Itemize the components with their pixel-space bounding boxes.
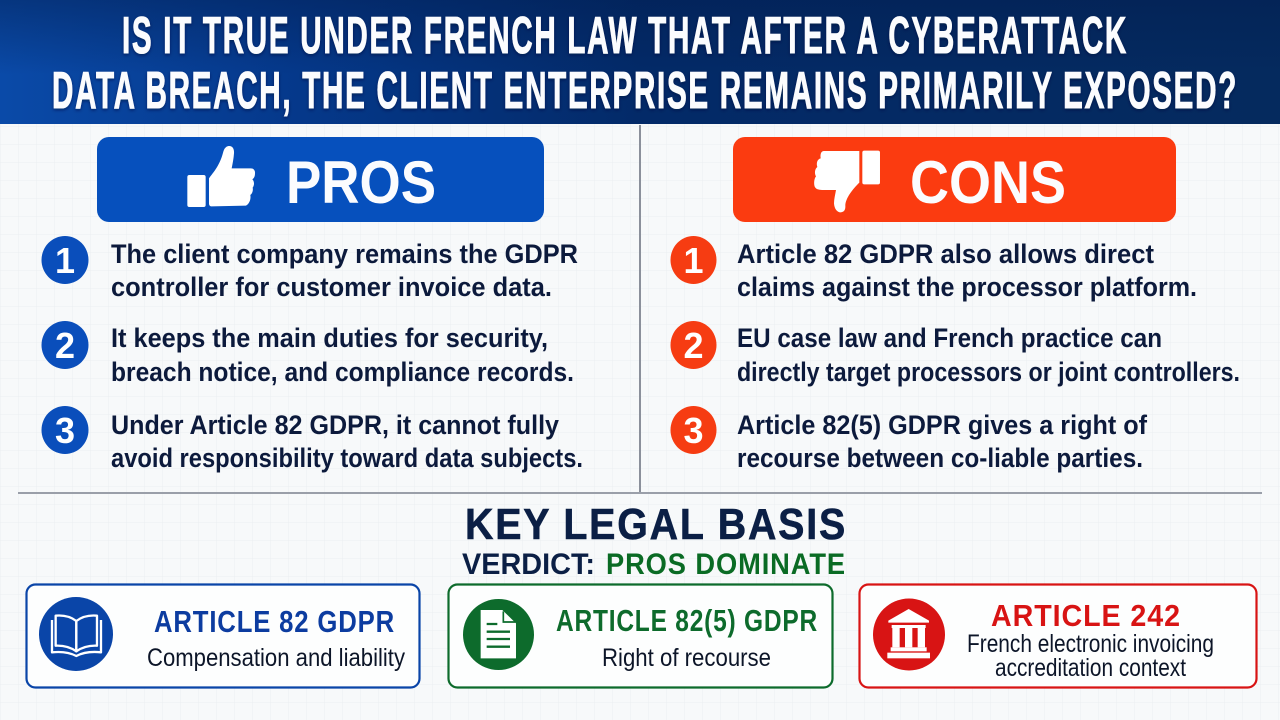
pro item 2: 2 bbox=[55, 325, 75, 366]
card: article 82 gdpr: Compensation and liability bbox=[147, 644, 405, 672]
icon: thumbs up bbox=[187, 146, 255, 207]
pro item 3: 3 bbox=[55, 410, 75, 451]
con item 1 bbox=[670, 236, 1197, 302]
con item 3: recourse between co-liable parties. bbox=[737, 443, 1143, 473]
card: article 82 gdpr: ARTICLE 82 GDPR bbox=[154, 604, 395, 639]
cons heading banner bbox=[733, 137, 1176, 222]
pro item 3 bbox=[42, 406, 583, 473]
card: article 242: French electronic invoicing bbox=[967, 630, 1214, 658]
pro item 1 bbox=[42, 236, 578, 302]
card: article 82(5) gdpr bbox=[448, 584, 832, 688]
verdict line bbox=[462, 548, 846, 581]
pros heading banner: PROS bbox=[286, 149, 436, 216]
icon: document bbox=[463, 599, 534, 670]
card: article 242 bbox=[860, 584, 1256, 688]
cons heading banner: CONS bbox=[910, 149, 1066, 216]
con item 1: 1 bbox=[683, 240, 704, 281]
pro item 1: The client company remains the GDPR bbox=[111, 239, 578, 269]
icon: open book bbox=[39, 597, 113, 671]
card: article 242: accreditation context bbox=[995, 654, 1186, 682]
panel: pros bbox=[42, 137, 583, 473]
pro item 2: It keeps the main duties for security, bbox=[111, 323, 548, 353]
con item 1: claims against the processor platform. bbox=[737, 272, 1197, 302]
pros heading banner bbox=[97, 137, 544, 222]
con item 3: Article 82(5) GDPR gives a right of bbox=[737, 410, 1148, 440]
icon: courthouse bbox=[873, 598, 945, 670]
pro item 1: controller for customer invoice data. bbox=[111, 272, 552, 302]
con item 2 bbox=[670, 321, 1240, 387]
con item 2: 2 bbox=[683, 325, 704, 366]
card: article 82(5) gdpr: ARTICLE 82(5) GDPR bbox=[556, 603, 818, 638]
panel: cons bbox=[670, 137, 1240, 473]
title bbox=[52, 7, 1238, 120]
con item 1: Article 82 GDPR also allows direct bbox=[737, 239, 1154, 269]
pro item 1: 1 bbox=[55, 240, 75, 281]
con item 3 bbox=[670, 406, 1148, 473]
heading: key legal basis: KEY LEGAL BASIS bbox=[465, 500, 847, 549]
verdict line: PROS DOMINATE bbox=[606, 548, 846, 581]
con item 2: EU case law and French practice can bbox=[737, 323, 1162, 353]
icon: thumbs down bbox=[814, 151, 880, 212]
card: article 82 gdpr bbox=[26, 584, 420, 688]
pro item 3: Under Article 82 GDPR, it cannot fully bbox=[111, 410, 559, 440]
header banner bbox=[0, 0, 1280, 124]
card: article 242: ARTICLE 242 bbox=[991, 598, 1181, 633]
pro item 3: avoid responsibility toward data subjects. bbox=[111, 443, 583, 473]
card: article 82(5) gdpr: Right of recourse bbox=[602, 644, 771, 672]
pro item 2 bbox=[42, 321, 574, 387]
con item 3: 3 bbox=[683, 410, 704, 451]
pro item 2: breach notice, and compliance records. bbox=[111, 357, 574, 387]
verdict line: VERDICT: bbox=[462, 548, 595, 581]
